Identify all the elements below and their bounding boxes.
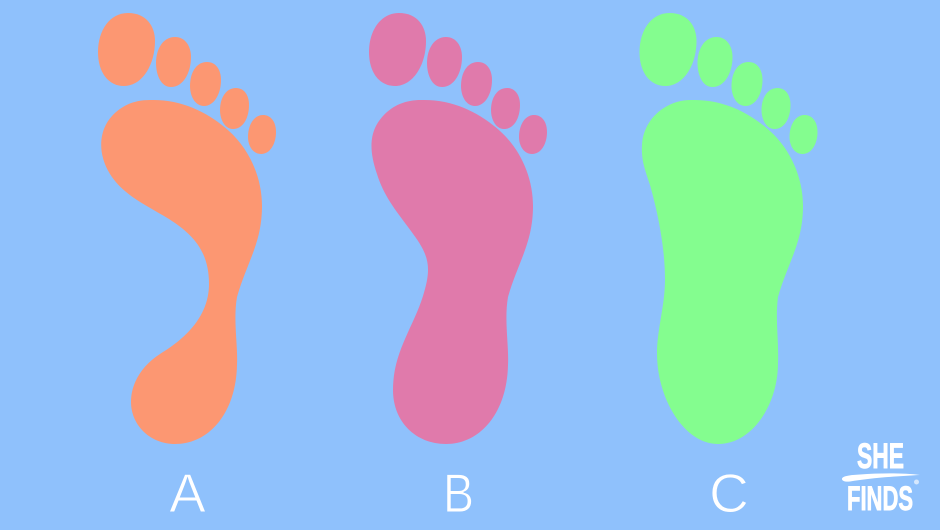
logo: She Finds: SHE (857, 437, 904, 476)
footprint C: flat arch, green (640, 13, 818, 444)
footprint B: normal arch, pink (369, 13, 547, 444)
label C: C (709, 462, 749, 524)
label A: A (169, 462, 206, 524)
label B: B (443, 462, 474, 524)
footprint A: low arch, orange (98, 13, 276, 444)
logo: She Finds (842, 437, 920, 518)
